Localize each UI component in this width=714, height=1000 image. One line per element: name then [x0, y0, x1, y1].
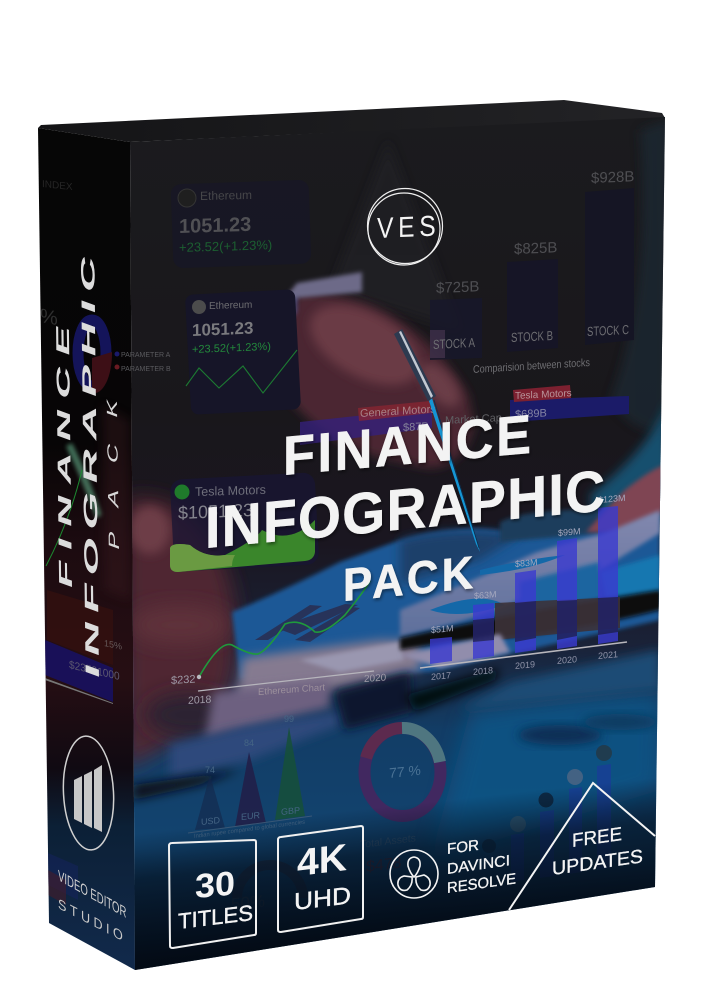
dark binding — [400, 590, 668, 650]
title INFOGRAPHIC: INFOGRAPHIC — [205, 459, 605, 561]
market cap comparison bars: $689B — [515, 407, 547, 421]
text: for DaVinci Resolve: RESOLVE — [447, 870, 516, 897]
faint gauge and total assets — [237, 836, 416, 880]
currency triangle chart — [188, 714, 312, 840]
side logo: circled bars — [61, 735, 116, 851]
Ethereum line chart: 2018 — [188, 694, 211, 707]
side brand text — [58, 867, 126, 944]
blue page — [230, 516, 660, 680]
title FINANCE: FINANCE — [283, 404, 531, 487]
Ethereum card 2 — [185, 289, 301, 415]
badge: 4K UHD: 4K — [297, 836, 347, 885]
parameter legend: PARAMETER A — [121, 352, 171, 359]
Ethereum card 1 — [178, 188, 272, 254]
fingers — [498, 479, 660, 543]
donut chart 77% — [364, 728, 440, 816]
stock comparison bar chart: STOCK C — [587, 322, 629, 339]
side title PACK: PACK — [103, 396, 122, 552]
box top flap — [38, 100, 665, 142]
yearly revenue bar chart: 2020 — [557, 654, 577, 666]
yearly revenue bar chart — [420, 493, 627, 682]
side panel chart fragments: % — [40, 305, 58, 330]
bottom shading — [134, 784, 656, 970]
icon: DaVinci Resolve logo — [390, 850, 438, 898]
Tesla Motors card with green area chart: $1051.23 — [178, 500, 253, 523]
badge: 30 titles: TITLES — [178, 900, 253, 934]
left side panel — [38, 128, 135, 970]
text: for DaVinci Resolve: FOR — [447, 837, 479, 858]
background photo: arm, hands, paper, desk — [124, 120, 668, 860]
side panel chart fragments — [40, 179, 130, 905]
donut chart 77%: 77 % — [389, 762, 421, 781]
currency triangle chart: 74 — [205, 765, 215, 775]
market cap comparison bars — [300, 385, 629, 445]
yearly revenue bar chart: $51M — [431, 623, 453, 635]
free updates corner ribbon — [509, 783, 655, 910]
currency triangle chart: 99 — [284, 714, 294, 724]
market cap comparison bars: General Motors — [360, 403, 436, 420]
currency triangle chart: USD — [201, 815, 220, 827]
stock comparison bar chart: $825B — [514, 239, 557, 258]
faint gauge and total assets: $478 — [366, 853, 402, 876]
Ethereum card 1: 1051.23 — [179, 214, 251, 238]
side brand text: STUDIO — [58, 895, 123, 944]
left fist — [124, 498, 236, 770]
yearly revenue bar chart: $63M — [474, 589, 496, 601]
Ethereum line chart: 2020 — [364, 672, 387, 685]
side panel chart fragments: INDEX — [42, 179, 73, 193]
faint gauge and total assets: Total Assets — [360, 832, 416, 851]
Ethereum card 2: 1051.23 — [192, 319, 253, 340]
yearly revenue bar chart: 2017 — [431, 670, 451, 682]
lavender page — [400, 510, 660, 636]
Ethereum card 1: +23.52(+1.23%) — [179, 237, 272, 255]
yearly revenue bar chart: $99M — [558, 526, 580, 538]
Ethereum card 2: Ethereum — [209, 300, 252, 312]
stock comparison bar chart — [430, 168, 634, 376]
currency triangle chart: 84 — [244, 738, 254, 748]
yearly revenue bar chart: $83M — [515, 557, 537, 569]
yearly revenue bar chart: 2019 — [515, 659, 535, 671]
yearly revenue bar chart: 2018 — [473, 665, 493, 677]
Tesla Motors card with green area chart: Tesla Motors — [195, 483, 266, 499]
upper hand — [268, 292, 474, 468]
VES logo — [368, 188, 442, 265]
market cap comparison bars: $87B — [403, 421, 429, 434]
coin bar chart — [482, 745, 612, 882]
side title FINANCE: FINANCE — [53, 322, 76, 592]
pale page — [232, 633, 426, 696]
badge: 30 titles: 30 — [195, 864, 235, 906]
currency triangle chart: EUR — [241, 810, 260, 822]
currency triangle chart: GBP — [281, 805, 300, 817]
front panel — [114, 117, 680, 980]
yearly revenue bar chart: $123M — [598, 493, 625, 505]
parameter legend — [114, 352, 171, 373]
badge: 30 titles — [169, 840, 256, 948]
market cap comparison bars: Tesla Motors — [515, 388, 572, 402]
Tesla Motors card with green area chart — [170, 472, 319, 572]
title — [205, 404, 605, 611]
title PACK: PACK — [343, 546, 474, 611]
pen — [394, 329, 480, 552]
Ethereum line chart: Ethereum Chart — [258, 682, 325, 698]
badge: 4K UHD — [278, 826, 363, 932]
side brand text: VIDEO EDITOR — [58, 867, 126, 922]
stock comparison bar chart: Comparision between stocks — [473, 357, 590, 376]
free updates corner ribbon: UPDATES — [552, 846, 643, 880]
Ethereum card 1: Ethereum — [200, 188, 252, 203]
parameter legend: PARAMETER B — [121, 366, 171, 373]
stock comparison bar chart: STOCK A — [433, 335, 475, 352]
Ethereum line chart: $232 — [171, 674, 195, 687]
yearly revenue bar chart: 2021 — [598, 649, 618, 661]
stock comparison bar chart: $928B — [591, 168, 634, 187]
text: for DaVinci Resolve: DAVINCI — [447, 852, 510, 878]
faint gauge and total assets: 50% — [231, 892, 265, 914]
VES logo: VES — [377, 210, 436, 244]
badge: 4K UHD: UHD — [294, 882, 351, 916]
desk — [441, 686, 658, 838]
market cap comparison bars: Market Cap — [445, 412, 502, 427]
product box — [38, 100, 665, 970]
side title INFOGRAPHIC: INFOGRAPHIC — [77, 252, 103, 682]
Ethereum card 2: +23.52(+1.23%) — [192, 341, 271, 356]
text: for DaVinci Resolve — [447, 837, 516, 897]
free updates corner ribbon: FREE — [572, 824, 622, 852]
currency triangle chart: Indian rupee compared to global currencies — [194, 820, 305, 840]
stock comparison bar chart: STOCK B — [511, 328, 553, 345]
Ethereum line chart — [171, 581, 387, 707]
stock comparison bar chart: $725B — [436, 278, 479, 297]
side panel chart fragments: $23521000 — [69, 659, 120, 683]
side panel chart fragments: 15% — [104, 638, 122, 652]
